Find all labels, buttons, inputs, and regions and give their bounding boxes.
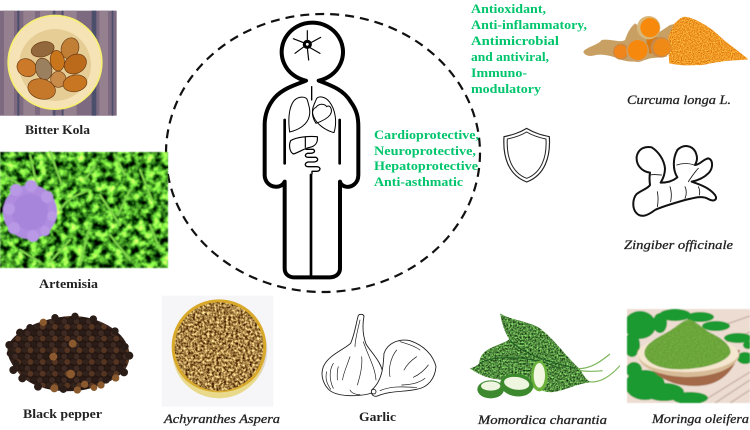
lungs: [289, 97, 336, 133]
effects text inside circle: Anti-asthmatic: [374, 174, 463, 189]
body outline: [265, 23, 358, 277]
effects text inside circle: Cardioprotective,: [374, 127, 479, 142]
effects text top: modulatory: [471, 81, 542, 96]
label: bitter kola: Bitter Kola: [25, 122, 91, 137]
icon: shield: [504, 128, 550, 182]
effects text top: Anti-inflammatory,: [471, 17, 587, 32]
neuron: [293, 31, 321, 60]
photo: moringa oleifera: [624, 309, 750, 404]
powder pile: [668, 16, 748, 66]
label: curcuma longa: Curcuma longa L.: [627, 92, 731, 107]
human body figure: [265, 23, 358, 277]
tendrils: [573, 354, 620, 382]
label: momordica charantia: Momordica charantia: [477, 412, 608, 427]
photo: achyranthes aspera: [162, 296, 273, 407]
icon: ginger: [633, 146, 716, 216]
liver: [290, 136, 317, 154]
photo: black pepper: [5, 312, 134, 394]
rhizome: [583, 23, 674, 62]
label: artemisia: Artemisia: [39, 276, 99, 291]
label: moringa oleifera: Moringa oleifera: [651, 411, 750, 426]
trachea: [310, 87, 314, 100]
dashed circle: [166, 14, 480, 292]
photo: curcuma longa: [583, 15, 750, 67]
effects text top: and antiviral,: [471, 49, 549, 64]
neuron nucleus: [306, 43, 309, 46]
effects text top: Antimicrobial: [471, 33, 559, 48]
effects text top: Immuno-: [471, 65, 527, 80]
slices: [531, 361, 548, 391]
intestine: [305, 149, 320, 174]
photo: artemisia: [0, 152, 168, 268]
effects text inside circle: Hepatoprotective: [374, 158, 478, 173]
heart: [312, 104, 331, 123]
label: garlic: Garlic: [359, 409, 396, 424]
arm and leg lines: [285, 120, 340, 275]
photo: bitter kola: [0, 11, 117, 116]
label: zingiber officinale: Zingiber officinale: [624, 237, 733, 252]
effects text top: [471, 1, 587, 96]
effects text inside circle: Neuroprotective,: [374, 143, 476, 158]
label: achyranthes aspera: Achyranthes Aspera: [163, 411, 281, 426]
effects text top: Antioxidant,: [471, 1, 546, 16]
icon: garlic: [322, 314, 436, 396]
effects text inside circle: [374, 127, 479, 189]
photo: momordica charantia: [468, 312, 620, 399]
label: black pepper: Black pepper: [23, 406, 102, 421]
garlic clove: [371, 340, 436, 396]
garlic bulb: [322, 314, 383, 396]
